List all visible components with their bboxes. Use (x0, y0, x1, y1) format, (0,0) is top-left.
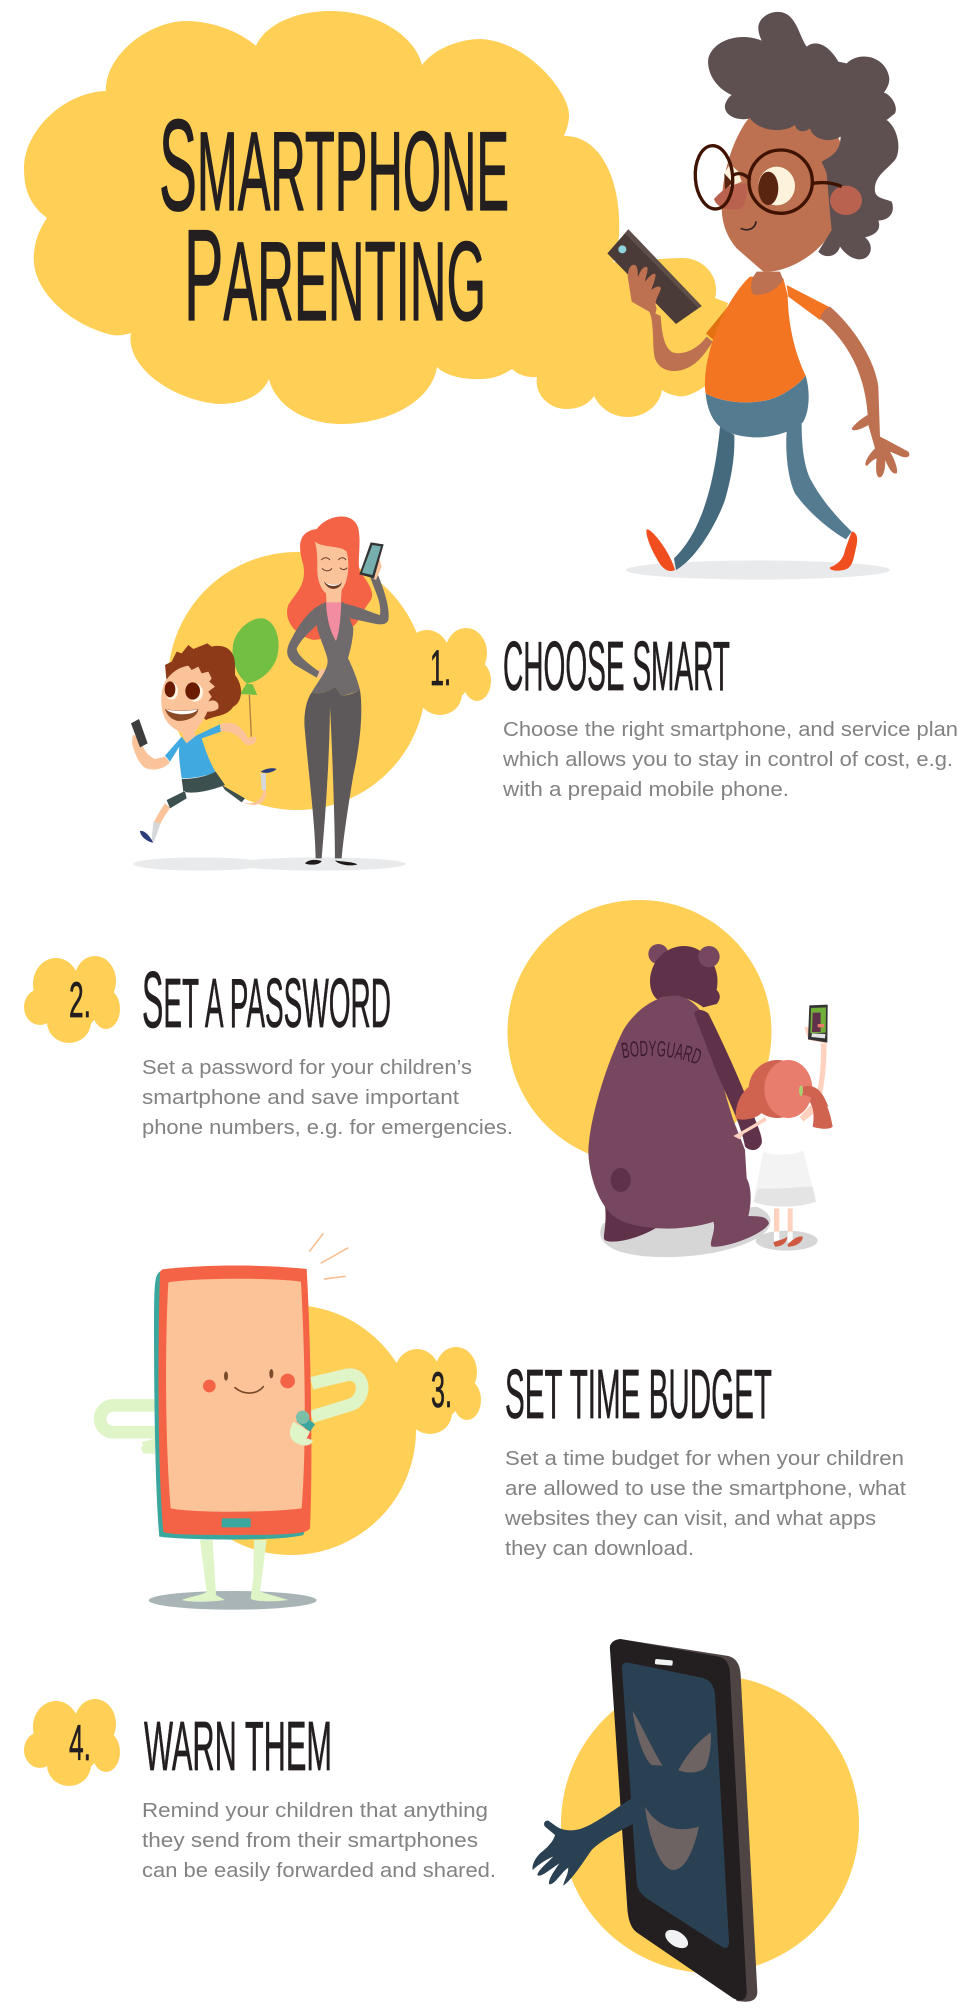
child body (646, 272, 909, 571)
section 3 yellow circle (166, 1305, 416, 1555)
illustration: smiling phone character checking watch (100, 1233, 362, 1610)
section 1 yellow circle (168, 552, 426, 810)
child head (607, 12, 898, 324)
text: set time budget: they can download. (505, 1538, 694, 1560)
balloon (233, 618, 279, 737)
text: choose smart: which allows you to stay in control of cost, e.g. (502, 749, 953, 771)
title cloud (24, 11, 728, 424)
illustration: walking child with glasses (607, 12, 909, 579)
text: set time budget (504, 1448, 906, 1560)
section 2 yellow circle (508, 900, 772, 1164)
bear: BODYGUARD (621, 1040, 701, 1064)
text: set time budget: websites they can visit, and what apps (504, 1508, 876, 1530)
bodyguard label (623, 1056, 698, 1065)
phone legs (182, 1540, 288, 1602)
ground shadows (133, 857, 406, 871)
number badge 1 (395, 628, 491, 715)
illustration: mother and son with phones (131, 516, 406, 871)
number 2: 2. (69, 972, 91, 1028)
text: choose smart (502, 719, 958, 801)
title: PARENTING (184, 202, 486, 348)
phone held by child (607, 229, 702, 324)
speaker and home button (655, 1659, 691, 1952)
text: choose smart: Choose the right smartphone, and service plan (503, 719, 958, 741)
phone body (154, 1266, 311, 1540)
ground shadow (149, 1591, 317, 1610)
wrist watch (290, 1411, 315, 1446)
number 4: 4. (69, 1715, 91, 1771)
alert rays (309, 1233, 348, 1279)
mother (287, 516, 389, 865)
text: warn them: can be easily forwarded and shared. (142, 1860, 496, 1882)
bear (588, 944, 769, 1247)
number 3: 3. (431, 1362, 452, 1418)
text: set a password: smartphone and save important (142, 1087, 459, 1109)
ground shadows (600, 1207, 818, 1257)
phone face (203, 1369, 295, 1393)
girl (733, 1005, 833, 1247)
text: SET A PASSWORD (142, 955, 391, 1044)
evil face (633, 1711, 711, 1870)
text: SMARTPHONE (159, 92, 509, 238)
text: WARN THEM (144, 1707, 332, 1785)
text: set a password: phone numbers, e.g. for emergencies. (142, 1117, 513, 1139)
shadow under child (626, 560, 890, 580)
text: set a password: Set a password for your children’s (142, 1057, 472, 1079)
phone casing (610, 1639, 757, 2002)
number badge 2 (24, 956, 120, 1043)
text: choose smart: with a prepaid mobile phone. (502, 779, 789, 801)
number 1: 1. (430, 640, 451, 696)
son (131, 643, 277, 843)
text: warn them: Remind your children that anything (142, 1800, 488, 1822)
phone arms (100, 1375, 362, 1432)
number badge 3 (385, 1347, 481, 1434)
text: set time budget: Set a time budget for when your children (505, 1448, 904, 1470)
number badge 4 (24, 1699, 120, 1786)
text: set a password (142, 1057, 513, 1139)
illustration: evil phone reaching out (532, 1639, 757, 2002)
title (159, 92, 509, 348)
text: warn them: they send from their smartphones (142, 1830, 478, 1852)
reaching arm (532, 1798, 633, 1886)
text: set time budget: are allowed to use the smartphone, what (505, 1478, 906, 1500)
phone screen (622, 1662, 729, 1948)
text: warn them (142, 1800, 496, 1882)
section 4 yellow circle (561, 1675, 859, 1973)
illustration: bear bodyguard and girl taking selfie (588, 944, 833, 1258)
